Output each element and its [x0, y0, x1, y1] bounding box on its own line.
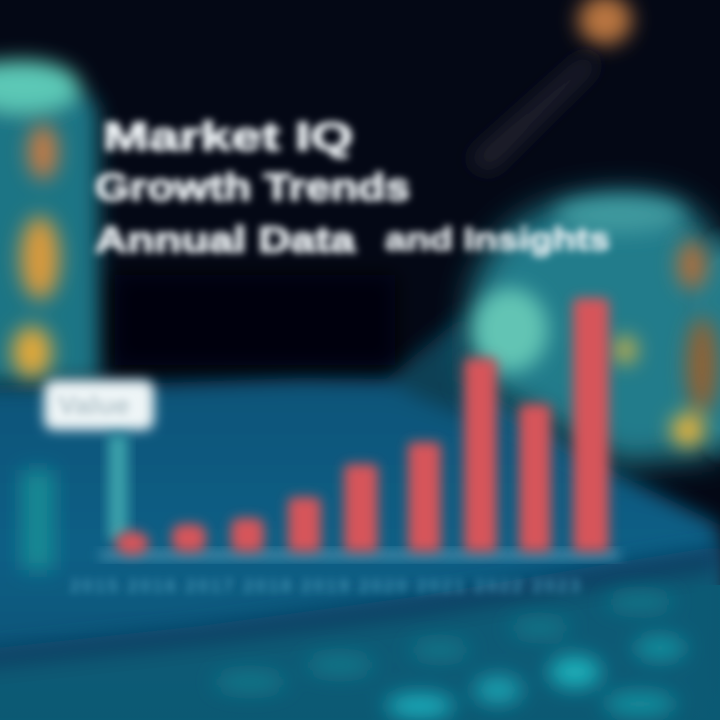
label callout: Value — [58, 390, 130, 420]
callout stem — [108, 435, 128, 540]
diagonal streak — [468, 55, 598, 172]
icon: keyboard lights — [214, 593, 686, 718]
icon: top orange orb — [578, 0, 632, 45]
panel: right teal arch — [470, 193, 720, 465]
bar chart — [100, 298, 620, 560]
title — [95, 115, 610, 260]
panel: lower keyboard band — [0, 546, 720, 720]
bottom edge fill — [0, 675, 720, 720]
title: and Insights — [385, 221, 610, 257]
panel: dark chart backdrop — [115, 275, 395, 365]
chart baseline — [100, 550, 620, 560]
right arch edge fill — [640, 225, 720, 465]
title: Annual Data — [95, 219, 356, 260]
bars — [115, 298, 609, 555]
icon: left orange lights — [12, 124, 60, 378]
panel: lower floor — [0, 310, 720, 720]
right edge fill — [680, 585, 720, 720]
left teal bar — [22, 470, 54, 570]
panel: left teal arch — [0, 60, 100, 385]
axis labels: 2015 2016 2017 2018 2019 2020 2021 2022 2023 — [70, 576, 580, 596]
label callout — [44, 380, 154, 430]
title: Growth Trends — [95, 167, 410, 209]
icon: right orange lights — [613, 240, 718, 447]
title: Market IQ — [103, 115, 353, 159]
right arch highlight — [472, 197, 685, 372]
